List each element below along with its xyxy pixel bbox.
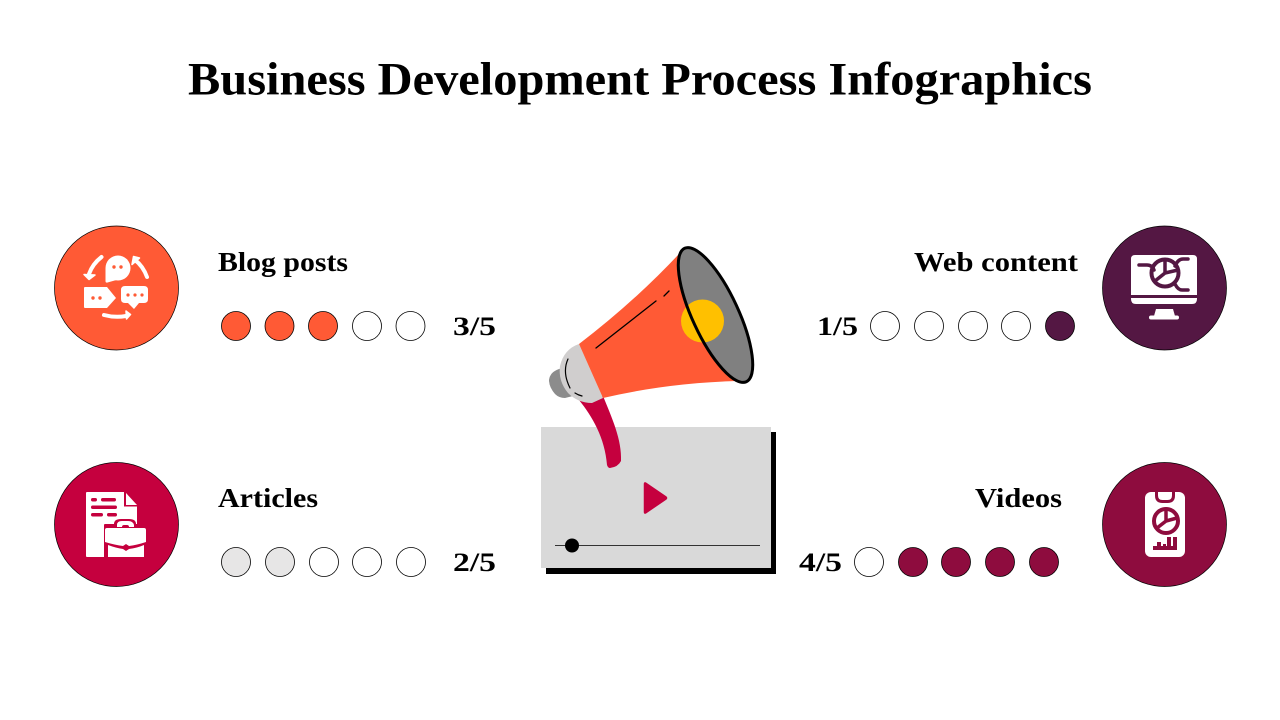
megaphone yellow circle: [681, 300, 724, 342]
icon: monitor with pie chart: [1102, 226, 1226, 350]
panel: web content: [817, 226, 1226, 350]
score: 2/5: 2/5: [453, 548, 496, 577]
megaphone back cap: [549, 367, 573, 398]
rating dots: 1 of 5: [870, 312, 1074, 340]
megaphone neck: [560, 344, 603, 403]
score: 4/5: 4/5: [799, 548, 842, 577]
illustration: megaphone: [549, 239, 767, 468]
title: Business Development Process Infographics: [188, 54, 1092, 106]
heading: articles: Articles: [218, 483, 318, 513]
score: 1/5: 1/5: [817, 312, 858, 341]
score: 3/5: 3/5: [453, 312, 496, 341]
panel: articles: [54, 462, 496, 586]
player shadow: [546, 432, 776, 574]
megaphone handle: [579, 396, 621, 468]
player screen: [541, 427, 771, 568]
heading: web content: Web content: [914, 247, 1078, 277]
megaphone rim: [664, 239, 767, 391]
heading: blog posts: Blog posts: [218, 247, 348, 277]
rating dots: 4 of 5: [854, 548, 1058, 576]
heading: videos: Videos: [975, 483, 1062, 513]
icon: chat cycle: [54, 226, 178, 350]
megaphone horn: [579, 254, 737, 398]
rating dots: 2 of 5: [222, 548, 426, 576]
icon: document and briefcase: [54, 462, 178, 586]
panel: videos: [799, 462, 1226, 586]
illustration: video player: [541, 427, 776, 574]
megaphone mouth: [664, 239, 767, 391]
megaphone detail lines: [596, 291, 669, 348]
icon: play button: [644, 483, 666, 513]
panel: blog posts: [54, 226, 496, 350]
rating dots: 3 of 5: [222, 312, 425, 340]
progress bar: [555, 538, 760, 552]
icon: phone with charts: [1102, 462, 1226, 586]
